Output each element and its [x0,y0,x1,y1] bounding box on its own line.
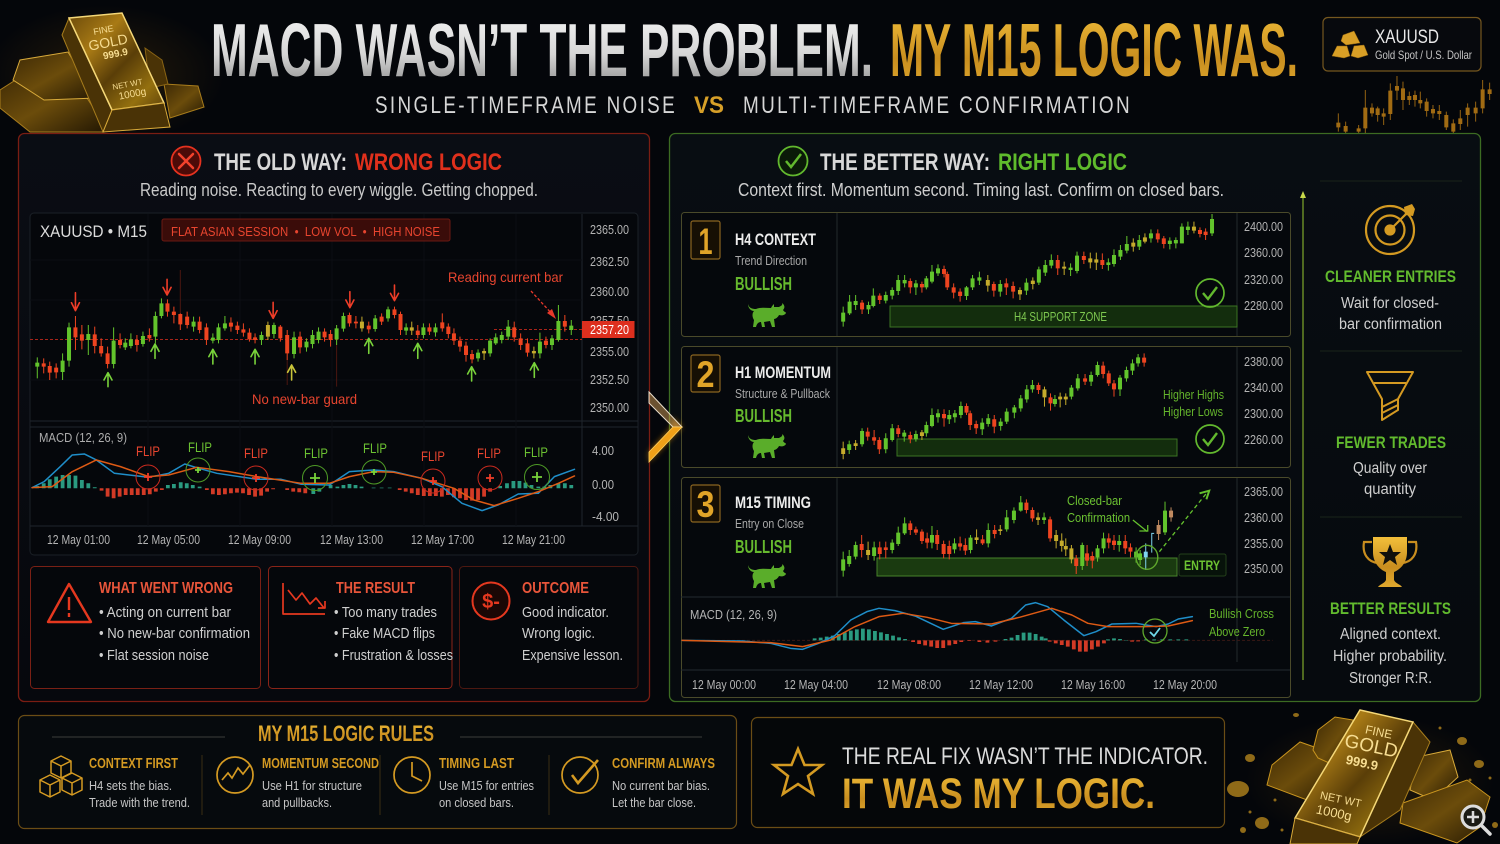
rule: timing last: on closed bars. [439,795,514,810]
step 1: H4 context: Trend Direction [735,253,807,268]
time axis: 12 May 13:00 [320,533,383,547]
card: the result: • Too many trades [334,605,437,621]
benefit: better results: BETTER RESULTS [1330,599,1451,618]
MACD axis [592,444,619,524]
icon: check [1196,425,1224,453]
MACD histogram and lines [32,454,574,511]
heading: the better way: THE BETTER WAY: [820,149,990,176]
number 1: 1 [698,221,712,262]
gold bars: bottom right: GOLD [1343,731,1400,762]
gold bars: top left: 999.9 [102,47,129,62]
price axis: 2360.00 [590,285,629,299]
price axis H4: 2400.00 [1244,220,1283,234]
card: outcome: OUTCOME [522,580,589,597]
step 3: M15 timing [681,478,1290,698]
step 2: H1 momentum [682,346,1290,468]
icon: dollar loss [472,582,510,620]
gold bars: top left: GOLD [87,30,129,54]
FLIP markers: FLIP [477,445,501,461]
time axis M15: 12 May 04:00 [784,678,848,692]
card: what went wrong: • No new-bar confirmation [99,626,250,642]
panel: the real fix: THE REAL FIX WASN’T THE INDICATOR. [842,743,1208,770]
price axis H1 [1244,355,1283,447]
rule: momentum second: and pullbacks. [262,795,332,810]
annotation: reading current bar [448,269,563,319]
annotation: closed-bar confirmation: Confirmation [1067,510,1130,525]
price tag 2357.20 [582,321,634,338]
annotation: reading current bar: Reading current bar [448,269,563,285]
gold bars: bottom right: 1000g [1315,802,1353,824]
icon: clock [394,757,430,793]
card: the result: THE RESULT [336,580,415,597]
candles M15 [37,270,571,387]
rule: context first: CONTEXT FIRST [89,756,178,772]
card: what went wrong [30,566,260,688]
step 3: M15 timing: M15 TIMING [735,494,811,512]
chart: XAUUSD M15 with MACD [30,213,638,555]
icon: green check [778,146,808,176]
time axis M15: 12 May 16:00 [1061,678,1125,692]
FLIP markers: FLIP [244,445,268,461]
icon: bull [748,303,786,327]
heading: rules: MY M15 LOGIC RULES [258,721,434,746]
time axis: 12 May 09:00 [228,533,291,547]
MACD label: MACD (12, 26, 9) [39,431,127,445]
bullish cross marker [1143,619,1167,643]
card: outcome: Expensive lesson. [522,648,623,664]
price axis M15: 2355.00 [1244,537,1283,551]
rule: timing last: Use M15 for entries [439,778,534,793]
candles H1 [843,353,1144,459]
heading: the better way [778,146,1127,176]
green signal arrows [104,338,538,387]
step 3: M15 timing: Entry on Close [735,516,804,531]
reference dashed lines [30,330,582,340]
icon: trophy [1364,537,1416,587]
candles H4 [843,214,1212,327]
price tag 2357.20: 2357.20 [590,323,629,337]
card: outcome: Wrong logic. [522,626,595,642]
MACD panel: Above Zero [1209,624,1265,639]
annotation: closed-bar confirmation [1067,493,1130,525]
price axis: 2365.00 [590,223,629,237]
price axis H1: 2340.00 [1244,381,1283,395]
MACD panel: Bullish Cross [1209,606,1274,621]
rule: confirm always: No current bar bias. [612,778,710,793]
rule: confirm always [562,756,715,810]
time axis M15 [692,678,1217,692]
entry tag [1179,554,1226,576]
subtitle: SINGLE-TIMEFRAME NOISE [375,92,677,119]
symbol badge: XAUUSD [1323,18,1481,71]
tag: flat asian session [162,219,450,241]
time axis: 12 May 05:00 [137,533,200,547]
step 1: H4 context: H4 CONTEXT [735,231,816,249]
gold bars: bottom right: FINE [1364,722,1394,742]
candles M15 timing [843,491,1209,577]
rule: context first: Trade with the trend. [89,795,190,810]
time axis M15: 12 May 00:00 [692,678,756,692]
rule: confirm always: CONFIRM ALWAYS [612,756,715,772]
vertical progress arrow [1300,191,1306,680]
FLIP markers [136,439,550,493]
icon: dollar loss: $- [482,591,500,613]
panel: the real fix: IT WAS MY LOGIC. [842,770,1155,818]
rule: momentum second [217,756,379,810]
heading: the old way: THE OLD WAY: [214,149,347,176]
icon: magnifier [1462,806,1490,834]
benefit: better results [1330,537,1451,687]
subtitle: MULTI-TIMEFRAME CONFIRMATION [743,92,1132,119]
annotation: higher highs higher lows: Higher Highs [1163,387,1224,402]
price axis: 2362.50 [590,255,629,269]
chart title: XAUUSD • M15 [40,222,147,241]
icon: red x [172,146,200,176]
FLIP markers: FLIP [304,445,328,461]
icon: funnel [1367,372,1413,420]
price axis H4: 2280.00 [1244,299,1283,313]
support zone: H4 SUPPORT ZONE [1014,310,1107,324]
step 2: H1 momentum: Structure & Pullback [735,386,830,401]
price axis: 2357.50 [590,314,629,328]
annotation: higher highs higher lows: Higher Lows [1163,404,1223,419]
rule: context first [40,756,190,810]
arrow: old way to better way [649,392,682,462]
gold bars: bottom right: 999.9 [1344,752,1379,773]
MACD axis: -4.00 [592,510,619,524]
support zone H1 [897,439,1177,456]
panel: my M15 logic rules [18,716,736,828]
rule: confirm always: Let the bar close. [612,795,696,810]
step 2: H1 momentum: BULLISH [735,406,792,426]
card: outcome: Good indicator. [522,605,609,621]
background gold candles top right [1338,76,1490,133]
benefit: cleaner entries: Wait for closed- [1341,295,1439,312]
step 2: H1 momentum: H1 MOMENTUM [735,364,831,382]
benefits column [1300,181,1462,687]
time axis: 12 May 21:00 [502,533,565,547]
card: outcome [460,566,638,688]
icon: check [1196,279,1224,307]
red signal arrows [71,279,398,318]
price axis M15: 2350.00 [1244,562,1283,576]
MACD axis: 4.00 [592,444,614,458]
panel: the better way [670,134,1480,702]
rule: context first: H4 sets the bias. [89,778,172,793]
benefit: better results: Stronger R:R. [1349,670,1432,687]
MACD axis: 0.00 [592,478,614,492]
icon: falling chart [283,583,325,614]
icon: bull [748,564,786,588]
MACD panel: MACD (12, 26, 9) [690,607,777,622]
icon: bull [748,434,786,458]
card: the result: • Frustration & losses [334,648,453,664]
title: MACD WASN’T THE PROBLEM. [211,8,873,92]
symbol badge: XAUUSD: Gold Spot / U.S. Dollar [1375,48,1472,62]
number 3: 3 [696,484,714,525]
time axis M15: 12 May 20:00 [1153,678,1217,692]
rule: timing last: TIMING LAST [439,756,514,772]
time axis: 12 May 17:00 [411,533,474,547]
FLIP markers: FLIP [188,439,212,455]
step 1: H4 context: BULLISH [735,274,792,294]
FLIP markers: FLIP [524,444,548,460]
icon: star [774,749,822,794]
gold bars: top left: FINE [92,23,114,37]
panel: the real fix [752,718,1224,828]
price axis H4 [1244,220,1283,313]
FLIP markers: FLIP [136,443,160,459]
gold bars: bottom right: NET WT [1319,790,1363,810]
subheading: old way: Reading noise. Reacting to every wiggle. Getting chopped. [140,180,538,200]
entry tag: ENTRY [1184,557,1221,573]
time axis: 12 May 01:00 [47,533,110,547]
FLIP markers: FLIP [421,448,445,464]
price axis: 2350.00 [590,401,629,415]
step 1: H4 context [682,212,1290,336]
card: what went wrong: • Flat session noise [99,648,209,664]
benefit: cleaner entries: CLEANER ENTRIES [1325,267,1456,286]
rule: timing last [394,756,534,810]
heading: the better way: RIGHT LOGIC [998,149,1127,176]
subheading: better way: Context first. Momentum second. Timing last. Confirm on closed bars. [738,180,1224,200]
price axis M15: 2365.00 [1244,485,1283,499]
price axis H1: 2380.00 [1244,355,1283,369]
annotation: higher highs higher lows [1163,387,1224,419]
heading: the old way: WRONG LOGIC [355,149,502,176]
benefit: fewer trades: Quality over [1353,460,1427,477]
symbol badge: XAUUSD: XAUUSD [1375,27,1439,48]
number 2: 2 [696,354,714,395]
gold nuggets [1227,713,1498,833]
card: what went wrong: WHAT WENT WRONG [99,580,233,597]
benefit: better results: Higher probability. [1333,648,1447,665]
icon: target [1366,204,1415,254]
price axis H1: 2300.00 [1244,407,1283,421]
time axis M15: 12 May 08:00 [877,678,941,692]
gold bars: top left: NET WT [112,77,143,92]
rule: momentum second: MOMENTUM SECOND [262,756,379,772]
icon: check circle [562,757,598,793]
support zone M15 [877,558,1177,576]
icon: gold bars [1332,31,1368,58]
support zone [890,306,1237,327]
price axis M15 [1244,485,1283,576]
icon: warning [48,584,91,622]
time axis [47,533,565,547]
benefit: better results: Aligned context. [1340,626,1441,643]
subtitle: VS [694,92,724,119]
step 3: M15 timing: BULLISH [735,537,792,557]
price axis M15: 2360.00 [1244,511,1283,525]
benefit: cleaner entries: bar confirmation [1339,316,1442,333]
card: what went wrong: • Acting on current bar [99,605,231,621]
benefit: fewer trades [1336,372,1446,498]
panel: the old way [18,134,650,702]
MACD panel [681,597,1290,670]
price axis H4: 2360.00 [1244,246,1283,260]
price axis: 2352.50 [590,373,629,387]
time axis M15: 12 May 12:00 [969,678,1033,692]
price axis: 2355.00 [590,345,629,359]
card: the result [268,566,453,688]
annotation: no new-bar guard: No new-bar guard [252,391,357,407]
gold bars: bottom right [1227,710,1498,844]
benefit: fewer trades: quantity [1364,481,1416,498]
price axis [590,223,629,415]
FLIP markers: FLIP [363,440,387,456]
icon: momentum [217,757,253,793]
icon: cubes [40,756,82,797]
annotation: closed-bar confirmation: Closed-bar [1067,493,1123,508]
price axis H4: 2320.00 [1244,273,1283,287]
gold bars: top left [0,5,225,145]
card: the result: • Fake MACD flips [334,626,435,642]
rule: momentum second: Use H1 for structure [262,778,362,793]
gold bars: top left: 1000g [118,86,147,103]
benefit: fewer trades: FEWER TRADES [1336,433,1446,452]
tag: flat asian session: FLAT ASIAN SESSION • LOW VOL • HIGH NOISE [171,224,440,239]
subtitle [375,92,1132,119]
price axis H1: 2260.00 [1244,433,1283,447]
benefit: cleaner entries [1325,204,1456,333]
heading: the old way [172,146,502,176]
